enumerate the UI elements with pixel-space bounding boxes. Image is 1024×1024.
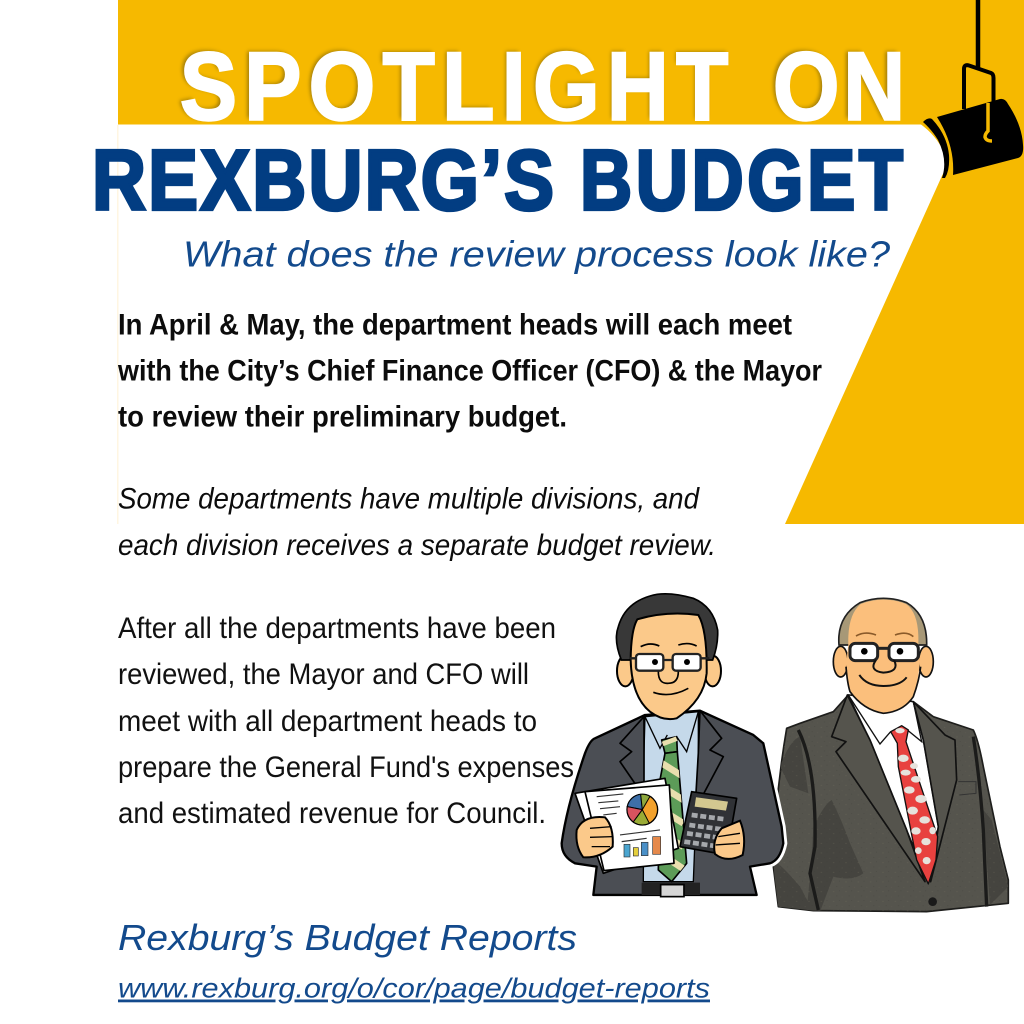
belt xyxy=(642,883,700,895)
tie xyxy=(891,726,938,884)
illustration: CFO with report and calculator xyxy=(562,594,783,897)
bold intro paragraph: with the City’s Chief Finance Officer (CFO) & the Mayor xyxy=(117,354,822,388)
italic note paragraph: Some departments have multiple divisions, and xyxy=(118,482,700,516)
italic note paragraph xyxy=(118,482,716,562)
body paragraph: prepare the General Fund's expenses xyxy=(118,751,574,784)
glasses xyxy=(630,654,709,671)
bold intro paragraph xyxy=(117,308,822,434)
title: Spotlight on: ON xyxy=(770,31,902,139)
face xyxy=(631,614,707,719)
title: Spotlight on: SPOTLIGHT xyxy=(177,31,727,139)
glasses xyxy=(850,643,918,661)
subtitle question: What does the review process look like? xyxy=(183,234,891,274)
title: Spotlight on: SPOTLIGHT xyxy=(180,32,728,141)
title: Rexburg's Budget: BUDGET xyxy=(580,133,903,228)
reports link: www.rexburg.org/o/cor/page/budget-reports xyxy=(118,972,710,1004)
italic note paragraph: each division receives a separate budget review. xyxy=(118,529,716,562)
title: Rexburg's Budget xyxy=(92,133,903,228)
collar xyxy=(848,695,922,744)
body paragraph: reviewed, the Mayor and CFO will xyxy=(118,658,529,691)
lapels xyxy=(832,695,957,882)
faint cream edge of white panel xyxy=(117,125,118,524)
title: Rexburg's Budget: REXBURG’S xyxy=(92,133,554,228)
body paragraph xyxy=(118,612,574,830)
hair xyxy=(839,598,927,645)
title: Spotlight on: ON xyxy=(773,32,905,141)
eyebrows, nose and mouth xyxy=(856,633,913,637)
hair xyxy=(616,594,718,660)
jacket xyxy=(562,711,783,895)
yellow spotlight background xyxy=(118,0,1024,524)
eyebrows, nose and mouth xyxy=(641,644,697,695)
bold intro paragraph: In April & May, the department heads will each meet xyxy=(118,308,792,342)
white cut-out outline xyxy=(562,711,783,895)
shirt xyxy=(848,695,938,882)
collar xyxy=(645,712,698,752)
shirt xyxy=(643,712,698,882)
reports heading: Rexburg’s Budget Reports xyxy=(118,917,577,958)
calculator xyxy=(680,792,737,855)
left hand xyxy=(576,817,613,857)
right hand xyxy=(714,821,744,859)
illustration: Mayor in suit with red tie xyxy=(770,598,1013,917)
head xyxy=(847,600,920,713)
report sheets xyxy=(575,778,678,873)
lapels xyxy=(620,711,723,810)
body paragraph: and estimated revenue for Council. xyxy=(118,797,546,830)
jacket xyxy=(773,695,1008,912)
spotlight lamp icon xyxy=(923,0,1023,178)
jacket shading and speckle xyxy=(774,703,1008,912)
button xyxy=(928,897,937,906)
bold intro paragraph: to review their preliminary budget. xyxy=(118,400,567,434)
bar chart xyxy=(624,844,630,857)
body paragraph: After all the departments have been xyxy=(118,612,556,645)
tie xyxy=(657,737,690,882)
ears xyxy=(617,656,634,686)
pie chart xyxy=(627,794,658,825)
body paragraph: meet with all department heads to xyxy=(118,705,537,738)
ears xyxy=(833,646,848,677)
